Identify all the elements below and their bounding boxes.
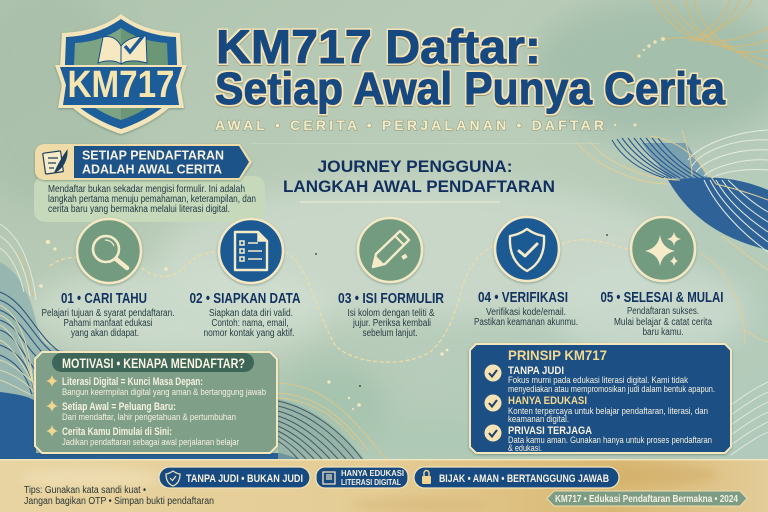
decoration: left blue waves — [0, 224, 300, 459]
icon: document list — [219, 219, 283, 283]
banner heading: ADALAH AWAL CERITA — [82, 162, 223, 176]
sparkle dots — [39, 234, 715, 410]
motivasi heading: MOTIVASI • KENAPA MENDAFTAR? — [62, 356, 245, 371]
decoration: right side lower curves — [700, 253, 768, 455]
decoration: top right gold arcs — [614, 0, 768, 127]
panel: prinsip — [470, 344, 731, 453]
step 03: jujur. Periksa kembali — [352, 318, 431, 329]
banner heading — [35, 144, 252, 180]
title: KM717 Daftar: — [216, 20, 541, 73]
banner heading: SETIAP PENDAFTARAN — [82, 148, 224, 162]
step 05: Mulai belajar & catat cerita — [614, 317, 712, 328]
motivasi item 3: Jadikan pendaftaran sebagai awal perjalanan belajar — [62, 436, 239, 447]
motivasi item 3 — [46, 425, 239, 447]
prinsip item 1: TANPA JUDI — [508, 365, 564, 377]
icon: sparkles — [631, 217, 695, 281]
badge: bijak: BIJAK • AMAN • BERTANGGUNG JAWAB — [439, 473, 609, 485]
prinsip item 3: Data kamu aman. Gunakan hanya untuk proses pendaftaran — [508, 434, 712, 445]
step 01: Pahami manfaat edukasi — [64, 318, 152, 329]
tips text: Jangan bagikan OTP • Simpan bukti pendaftaran — [24, 496, 214, 507]
logo: KM717 shield — [55, 14, 187, 134]
icon: magnifier — [77, 219, 141, 283]
prinsip item 2: keamanan digital. — [508, 413, 569, 424]
badge: bijak — [414, 467, 619, 488]
step 01 — [42, 219, 174, 339]
step 04: 04 • VERIFIKASI — [478, 290, 568, 306]
prinsip heading: PRINSIP KM717 — [508, 347, 607, 363]
prinsip item 1 — [484, 364, 715, 394]
motivasi item 1: Literasi Digital = Kunci Masa Depan: — [62, 376, 203, 388]
step 02: nomor kontak yang aktif. — [204, 328, 294, 339]
prinsip item 2: Konten terpercaya untuk belajar pendaftaran, literasi, dan — [508, 405, 708, 416]
heading: journey — [283, 157, 555, 196]
icon: shield check — [495, 217, 559, 281]
step 04: Verifikasi kode/email. — [486, 307, 566, 318]
step 04 — [474, 217, 578, 328]
step 05: 05 • SELESAI & MULAI — [600, 290, 724, 306]
step 05: Pendaftaran sukses. — [627, 306, 699, 317]
step 03: sebelum lanjut. — [362, 328, 418, 339]
intro text box — [34, 176, 265, 222]
motivasi item 2: Setiap Awal = Peluang Baru: — [62, 401, 176, 413]
step 01: yang akan didapat. — [71, 328, 139, 339]
step 03 — [338, 218, 444, 339]
decoration: concentric lines beside motivasi panel — [278, 383, 386, 459]
intro text box: cerita baru yang bermakna melalui literasi digital. — [48, 204, 230, 215]
title — [215, 20, 726, 114]
icon: open book with check — [98, 36, 147, 64]
icon: pencil — [358, 218, 422, 282]
step 05: baru kamu. — [642, 327, 684, 338]
icon: note and quill — [43, 151, 67, 174]
prinsip item 3: & edukasi. — [508, 442, 542, 453]
subtitle: AWAL • CERITA • PERJALANAN • DAFTAR — [215, 117, 604, 133]
divider ornament — [300, 201, 500, 203]
step 04: Pastikan keamanan akunmu. — [474, 317, 578, 328]
prinsip item 2: HANYA EDUKASI — [508, 395, 587, 407]
intro text box: Mendaftar bukan sekadar mengisi formulir. Ini adalah — [48, 184, 245, 195]
motivasi item 1 — [46, 375, 266, 397]
heading: journey: JOURNEY PENGGUNA: — [318, 157, 512, 176]
intro text box: langkah pertama menuju pemahaman, keterampilan, dan — [48, 194, 256, 205]
step 01: 01 • CARI TAHU — [61, 291, 147, 307]
motivasi item 3: Cerita Kamu Dimulai di Sini: — [62, 426, 172, 438]
prinsip item 1: Fokus murni pada edukasi literasi digital. Kami tidak — [508, 374, 688, 385]
motivasi heading — [52, 353, 254, 372]
badge: tanpa judi — [159, 467, 310, 488]
step 02: 02 • SIAPKAN DATA — [190, 291, 301, 307]
bottom sand band — [0, 459, 768, 512]
motivasi item 1: Bangun keermpilan digital yang aman & bertanggung jawab — [62, 386, 266, 397]
tips text: Tips: Gunakan kata sandi kuat • — [24, 485, 147, 496]
panel: motivasi — [35, 352, 277, 453]
step 03: Isi kolom dengan teliti & — [348, 308, 435, 319]
step 01: Pelajari tujuan & syarat pendaftaran. — [42, 308, 174, 319]
title: Setiap Awal Punya Cerita — [215, 63, 726, 114]
step 02: Contoh: nama, email, — [212, 318, 288, 329]
dotted journey path — [50, 240, 630, 362]
logo: KM717 shield: KM717 — [68, 64, 174, 106]
heading: journey: LANGKAH AWAL PENDAFTARAN — [283, 177, 555, 196]
motivasi item 2: Dari mendaftar, lahir pengetahuan & pertumbuhan — [62, 411, 236, 422]
badge: tanpa judi: TANPA JUDI • BUKAN JUDI — [186, 473, 303, 485]
prinsip item 3: PRIVASI TERJAGA — [508, 425, 592, 437]
step 02 — [190, 219, 301, 339]
badge: hanya edukasi — [316, 467, 408, 488]
motivasi item 2 — [46, 400, 236, 422]
prinsip item 1: menyediakan atau mempromosikan judi dalam bentuk apapun. — [508, 383, 715, 394]
prinsip item 3 — [484, 424, 712, 453]
step 02: Siapkan data diri valid. — [209, 308, 293, 319]
prinsip item 2 — [484, 394, 708, 424]
footer ribbon — [547, 491, 747, 506]
decoration: right blue leaf waves — [576, 130, 768, 270]
badge: hanya edukasi: HANYA EDUKASI — [341, 469, 404, 478]
callout: setiap pendaftaran — [34, 144, 265, 222]
step 03: 03 • ISI FORMULIR — [338, 291, 444, 307]
badge: hanya edukasi: LITERASI DIGITAL — [341, 478, 401, 487]
tips text — [24, 485, 214, 507]
step 05 — [600, 217, 724, 338]
